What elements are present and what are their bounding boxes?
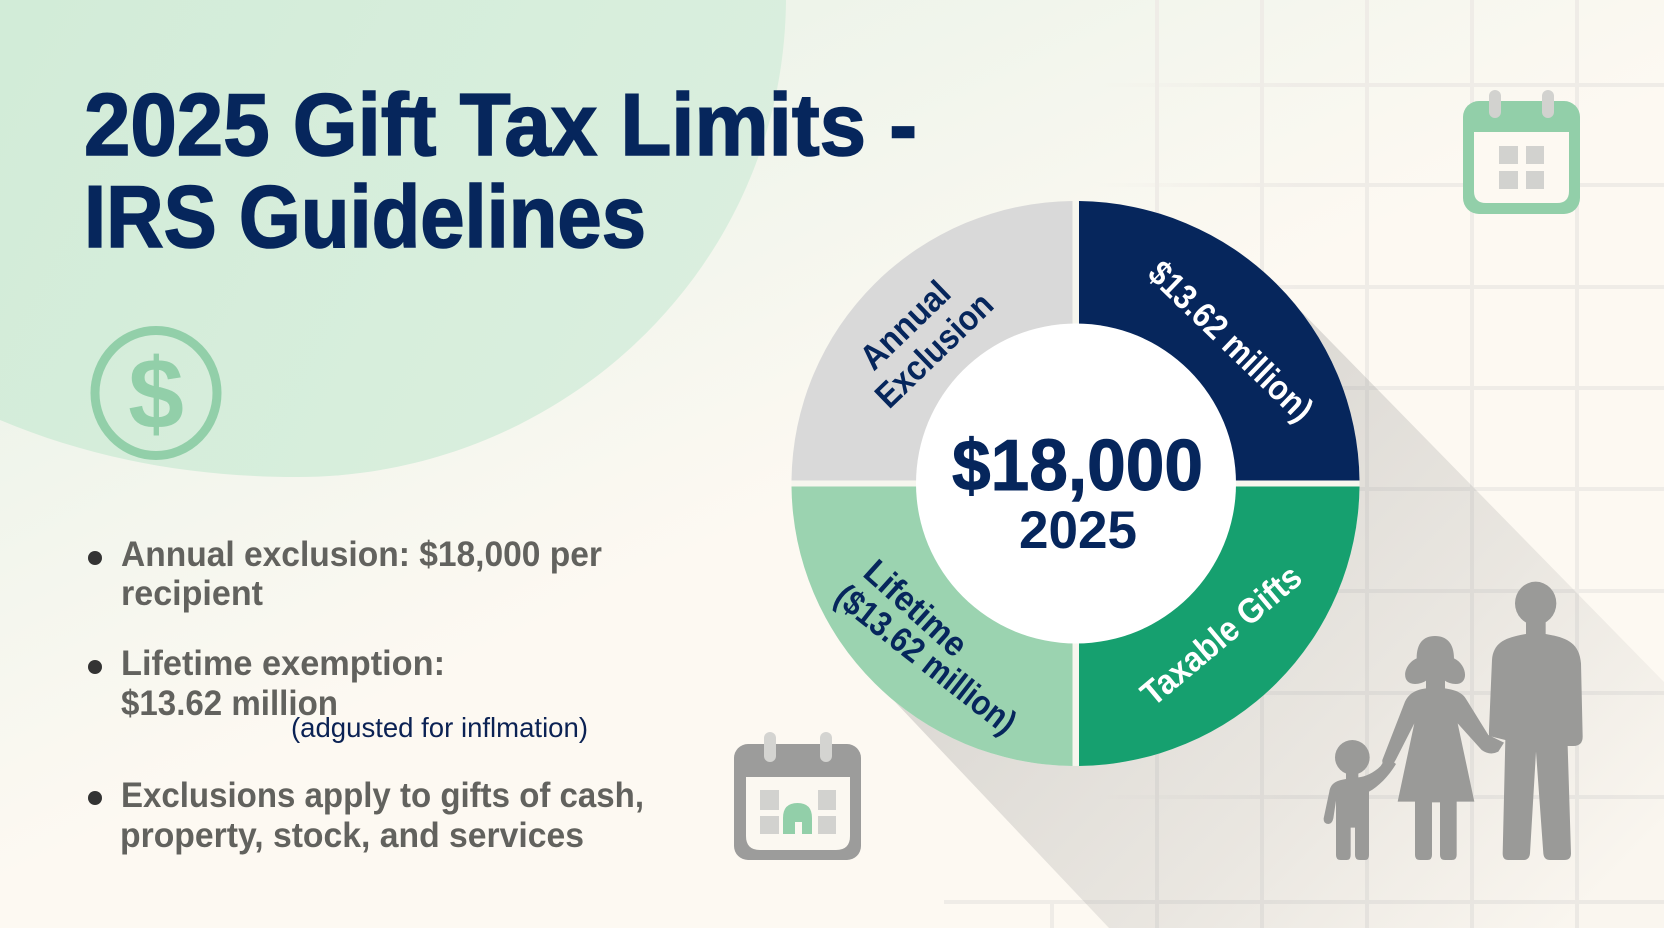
segment: taxable gifts: [1079, 486, 1360, 766]
segment: 13.62 million: [1079, 201, 1360, 480]
centre value: $18,000: [952, 426, 1203, 506]
bullet: annual exclusion: Annual exclusion: $18,000 per: [121, 535, 602, 574]
background green blob: [0, 0, 786, 477]
icon: dollar coin: [95, 330, 217, 456]
centre circle: [916, 324, 1236, 644]
segment: annual exclusion: [792, 201, 1072, 480]
bullet: lifetime exemption: Lifetime exemption:: [121, 644, 445, 683]
icon: calendar top right: [1463, 90, 1580, 214]
woman: [1382, 636, 1504, 860]
title: IRS Guidelines: [84, 167, 646, 266]
label: 13.62 million: $13.62 million): [1140, 253, 1321, 429]
label: lifetime: ($13.62 million): [827, 577, 1024, 742]
donut chart: [792, 201, 1360, 766]
bullet: annual exclusion: [88, 535, 602, 613]
bullet: exclusions apply: property, stock, and services: [120, 816, 584, 855]
bullet: lifetime exemption: [88, 644, 445, 723]
note: adjusted for inflation: (adgusted for inflmation): [291, 712, 588, 743]
centre year: 2025: [1019, 501, 1137, 560]
bullet: exclusions apply: [88, 776, 644, 855]
man: [1489, 582, 1583, 860]
label: annual exclusion: Exclusion: [868, 285, 1001, 416]
icon: dollar coin: $: [128, 338, 184, 450]
label: taxable gifts: Taxable Gifts: [1133, 557, 1309, 714]
segment: lifetime: [792, 486, 1072, 766]
long diagonal shadow behind the donut: [880, 300, 1664, 928]
label: annual exclusion: Annual: [852, 273, 958, 378]
icon: calendar with house: [734, 732, 861, 860]
icon: family silhouette: [1324, 582, 1583, 860]
label: lifetime: Lifetime: [856, 552, 975, 665]
title: 2025 Gift Tax Limits -: [84, 75, 917, 174]
bullet: exclusions apply: Exclusions apply to gifts of cash,: [121, 776, 644, 815]
bullet: annual exclusion: recipient: [121, 574, 263, 613]
bullet: lifetime exemption: $13.62 million: [121, 684, 338, 723]
title: [84, 75, 917, 266]
child: [1324, 740, 1396, 860]
bullet list: [88, 535, 644, 855]
